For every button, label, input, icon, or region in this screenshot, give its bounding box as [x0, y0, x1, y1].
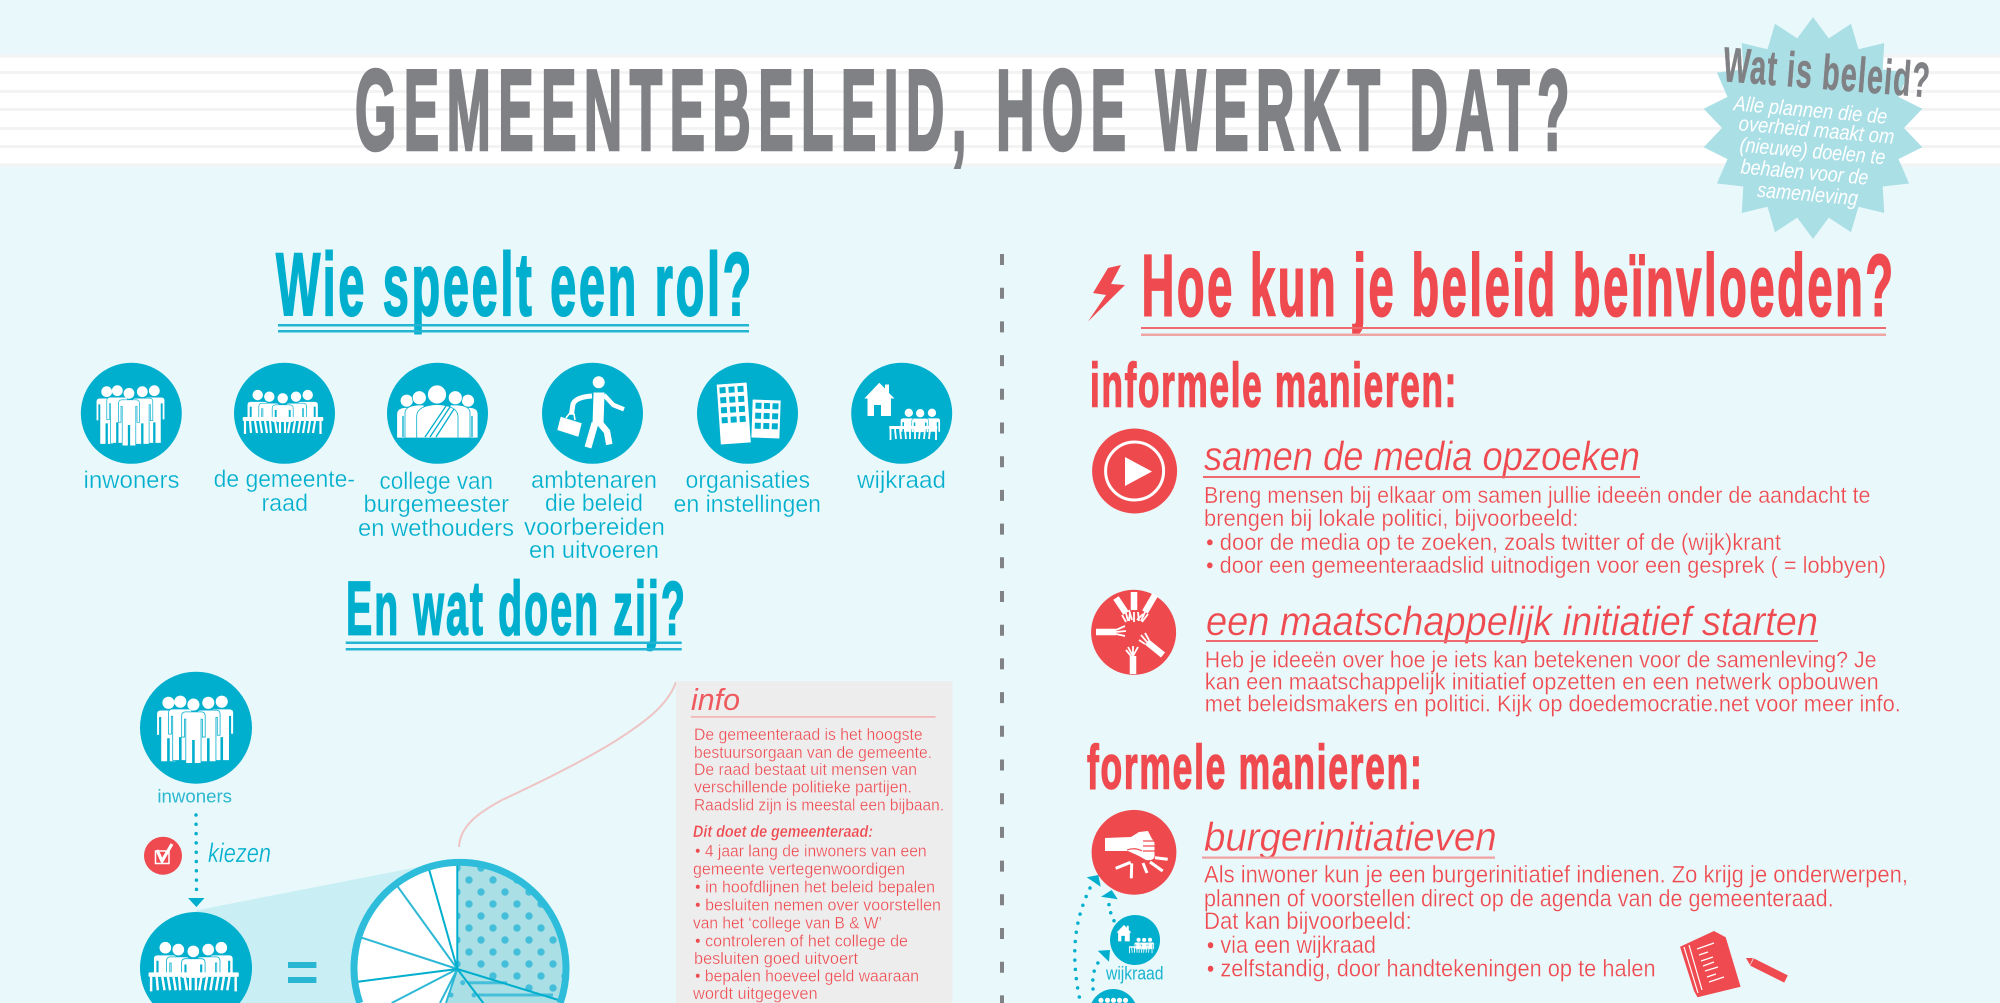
item heading: burgerinitiatieven: [1204, 816, 1497, 860]
icon: inwoners small: [1092, 989, 1135, 1003]
panel: hoe kun je beleid beinvloeden: [1075, 238, 1908, 1003]
equals sign: [288, 962, 316, 983]
icon: organisaties: [697, 363, 798, 464]
item text: • via een wijkraad: [1207, 932, 1376, 959]
item text: Breng mensen bij elkaar om samen jullie ideeën onder de aandacht te: [1204, 482, 1870, 508]
icon: fist: [1092, 810, 1176, 895]
icon: wijkraad small: [1110, 915, 1160, 965]
info text: • besluiten nemen over voorstellen: [695, 896, 941, 915]
item text: • zelfstandig, door handtekeningen op te halen: [1207, 956, 1656, 983]
info text: De gemeenteraad is het hoogste: [694, 725, 923, 744]
item text: [1204, 482, 1886, 578]
item: maatschappelijk initiatief: [1091, 590, 1901, 717]
label: kiezen: kiezen: [208, 838, 271, 868]
role labels: organisaties: [686, 467, 810, 494]
info text: gemeente vertegenwoordigen: [693, 860, 905, 879]
info text: • in hoofdlijnen het beleid bepalen: [695, 878, 935, 897]
callout text: [1731, 92, 1895, 210]
info text: besluiten goed uitvoert: [694, 949, 858, 968]
label: inwoners: inwoners: [157, 786, 232, 807]
role labels: inwoners: [84, 467, 180, 494]
item text: • door de media op te zoeken, zoals twitter of de (wijk)krant: [1206, 529, 1781, 555]
icon: lightning bolt: [1088, 265, 1125, 322]
callout text: (nieuwe) doelen te: [1739, 134, 1886, 169]
item text: Heb je ideeën over hoe je iets kan betekenen voor de samenleving? Je: [1205, 647, 1876, 673]
item heading: samen de media opzoeken: [1204, 433, 1640, 479]
role labels: raad: [262, 490, 308, 517]
heading: en wat doen zij: En wat doen zij?: [346, 566, 687, 652]
info text: bestuursorgaan van de gemeente.: [694, 743, 932, 762]
center divider: [1000, 254, 1004, 1003]
item text: • door een gemeenteraadslid uitnodigen voor een gesprek ( = lobbyen): [1206, 552, 1886, 578]
icon: ambtenaren: [542, 363, 643, 464]
icon: college: [387, 363, 488, 464]
info text: • 4 jaar lang de inwoners van een: [695, 842, 927, 861]
info text: Raadslid zijn is meestal een bijbaan.: [694, 796, 944, 815]
info text: van het ‘college van B & W’: [693, 914, 882, 933]
item text: [1204, 862, 1908, 983]
role labels: ambtenaren: [531, 467, 657, 494]
info heading: info: [691, 682, 740, 717]
item heading: een maatschappelijk initiatief starten: [1206, 598, 1818, 644]
panel: info: [676, 681, 952, 1003]
subheading: formele manieren: formele manieren:: [1087, 734, 1424, 802]
callout text: Alle plannen die de: [1731, 92, 1888, 129]
starburst: [1704, 17, 1922, 239]
heading: wie speelt een rol: Wie speelt een rol?: [276, 234, 754, 334]
icon: joined hands: [1091, 590, 1176, 675]
callout: wat is beleid: [1704, 17, 1933, 239]
role labels: en instellingen: [674, 491, 821, 518]
item: burgerinitiatieven: [1075, 810, 1908, 1003]
pie: zetels gemeenteraad: [350, 858, 570, 1003]
item text: brengen bij lokale politici, bijvoorbeeld:: [1204, 505, 1578, 531]
icon: pencil: [1746, 958, 1786, 979]
role labels: [84, 466, 946, 564]
info text: Dit doet de gemeenteraad:: [693, 822, 873, 841]
callout text: overheid maakt om: [1738, 112, 1895, 149]
icon: gemeenteraad: [234, 363, 335, 464]
item text: Als inwoner kun je een burgerinitiatief indienen. Zo krijg je onderwerpen,: [1204, 862, 1908, 889]
role labels: voorbereiden: [524, 514, 665, 541]
panel: wie speelt een rol: [81, 234, 952, 564]
item text: [1205, 647, 1901, 717]
banner: [0, 54, 2000, 166]
cone to pie: [196, 865, 470, 1003]
role labels: college van: [380, 468, 493, 495]
icon: inwoners: [81, 363, 182, 464]
dotted arrows: [1075, 875, 1118, 997]
callout text: samenleving: [1756, 179, 1859, 210]
info text: • bepalen hoeveel geld waaraan: [695, 967, 919, 986]
role labels: burgemeester: [364, 491, 509, 518]
connector curve: [459, 682, 676, 847]
role labels: en wethouders: [358, 515, 514, 542]
subheading: informele manieren: informele manieren:: [1090, 352, 1458, 420]
info text: verschillende politieke partijen.: [694, 778, 912, 797]
info text: [692, 725, 944, 1003]
panel: en wat doen zij: [140, 566, 952, 1003]
callout text: behalen voor de: [1740, 155, 1869, 190]
item text: Dat kan bijvoorbeeld:: [1204, 908, 1412, 935]
role labels: en uitvoeren: [529, 537, 659, 564]
label: wijkraad small: wijkraad: [1105, 963, 1164, 983]
dotted arrow: kiezen: [188, 815, 204, 907]
icon: petition document: [1680, 931, 1741, 997]
icon: inwoners large: [140, 672, 252, 784]
role labels: de gemeente-: [214, 466, 355, 493]
icon: play: [1092, 428, 1177, 514]
icon: ballot check: [144, 837, 182, 875]
info text: wordt uitgegeven: [692, 984, 818, 1003]
info text: De raad bestaat uit mensen van: [694, 760, 917, 779]
role labels: die beleid: [545, 490, 643, 517]
info text: • controleren of het college de: [695, 932, 908, 951]
item text: met beleidsmakers en politici. Kijk op doedemocratie.net voor meer info.: [1205, 691, 1901, 717]
role labels: wijkraad: [856, 467, 946, 494]
item text: plannen of voorstellen direct op de agenda van de gemeenteraad.: [1204, 886, 1834, 913]
icon: gemeenteraad large: [140, 912, 252, 1003]
icon: wijkraad: [851, 363, 952, 464]
item: samen de media opzoeken: [1092, 428, 1886, 578]
item text: kan een maatschappelijk initiatief opzetten en een netwerk opbouwen: [1205, 668, 1879, 694]
